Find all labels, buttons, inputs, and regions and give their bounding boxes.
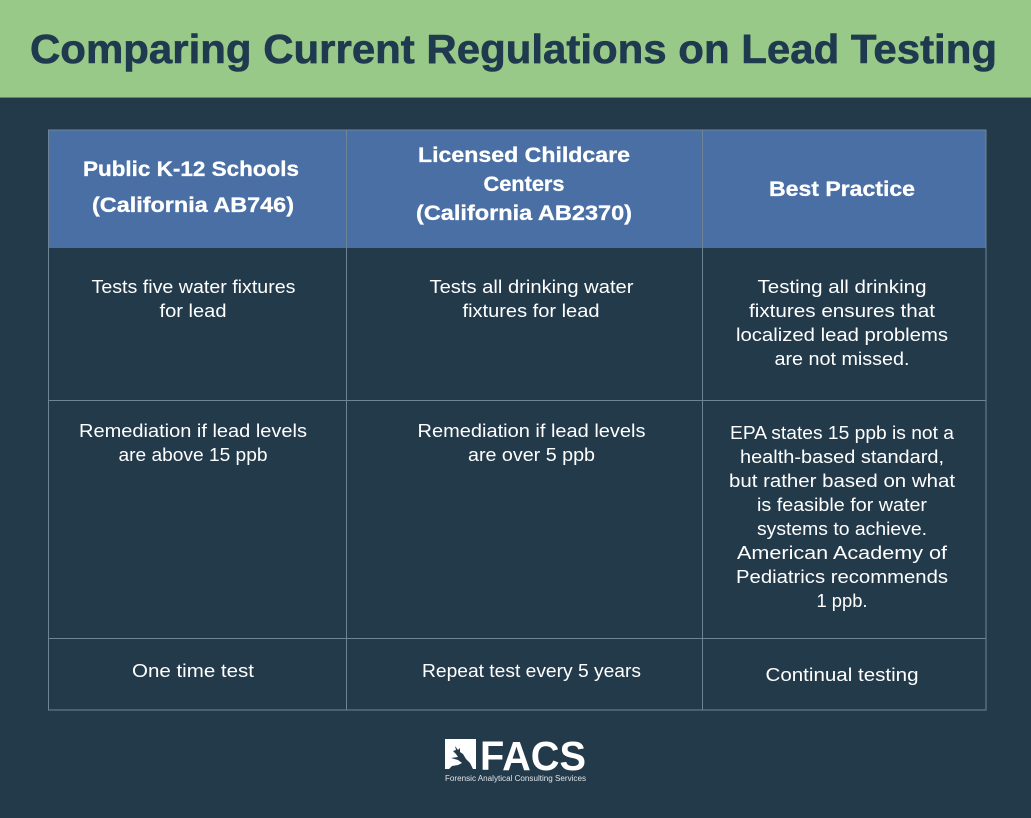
table header background	[48, 130, 986, 248]
logo tagline: Forensic Analytical Consulting Services	[445, 774, 586, 783]
column heading: Licensed Childcare Centers	[416, 144, 632, 225]
column heading: Licensed Childcare Centers: Licensed Childcare	[418, 144, 630, 167]
title: Comparing Current Regulations on Lead Testing	[30, 26, 997, 72]
row 3: childcare frequency: Repeat test every 5 years	[422, 660, 641, 681]
row 1: best practice fixtures	[736, 276, 948, 369]
row 1: best practice fixtures: fixtures ensures that	[749, 300, 935, 321]
column heading: Licensed Childcare Centers: (California AB2370)	[416, 202, 632, 225]
row 3: schools frequency: One time test	[132, 660, 254, 681]
row 1: schools fixtures: Tests five water fixtures	[92, 276, 296, 297]
row 2: best practice standard: systems to achieve.	[757, 518, 927, 539]
row 2: childcare remediation: are over 5 ppb	[468, 444, 595, 465]
row 2: schools remediation	[79, 420, 307, 465]
icon: logo mark	[445, 739, 476, 769]
row 1: best practice fixtures: localized lead problems	[736, 324, 948, 345]
column heading: Licensed Childcare Centers: Centers	[484, 173, 564, 196]
row 1: childcare fixtures: fixtures for lead	[462, 300, 600, 321]
row 2: best practice standard: but rather based on what	[729, 470, 955, 491]
row 2: best practice standard: Pediatrics recommends	[736, 566, 948, 587]
row 1: best practice fixtures: are not missed.	[774, 348, 910, 369]
column heading: Public K-12 Schools: (California AB746)	[92, 194, 294, 217]
column heading: Public K-12 Schools: Public K-12 Schools	[83, 158, 299, 181]
title banner	[0, 0, 1031, 98]
row 1: schools fixtures	[92, 276, 296, 321]
row 2: childcare remediation: Remediation if lead levels	[418, 420, 646, 441]
row 2: schools remediation: are above 15 ppb	[118, 444, 268, 465]
row 2: best practice standard: EPA states 15 ppb is not a	[730, 422, 955, 443]
row 1: childcare fixtures	[430, 276, 634, 321]
row 3: best practice frequency: Continual testing	[766, 664, 918, 685]
row 2: best practice standard: is feasible for water	[757, 494, 927, 515]
column heading: Best Practice: Best Practice	[769, 178, 915, 201]
row 2: best practice standard: American Academy of	[737, 542, 948, 563]
row 2: best practice standard: 1 ppb.	[816, 590, 868, 611]
row 2: childcare remediation	[418, 420, 646, 465]
column heading: Public K-12 Schools	[83, 158, 299, 217]
FACS logo	[445, 733, 586, 783]
row 2: best practice standard: health-based standard,	[740, 446, 944, 467]
logo wordmark: FACS	[480, 733, 586, 779]
row 1: best practice fixtures: Testing all drinking	[758, 276, 926, 297]
row 1: childcare fixtures: Tests all drinking water	[430, 276, 634, 297]
comparison table	[48, 130, 986, 710]
row 2: schools remediation: Remediation if lead levels	[79, 420, 307, 441]
row 1: schools fixtures: for lead	[160, 300, 226, 321]
row 2: best practice standard	[729, 422, 955, 611]
